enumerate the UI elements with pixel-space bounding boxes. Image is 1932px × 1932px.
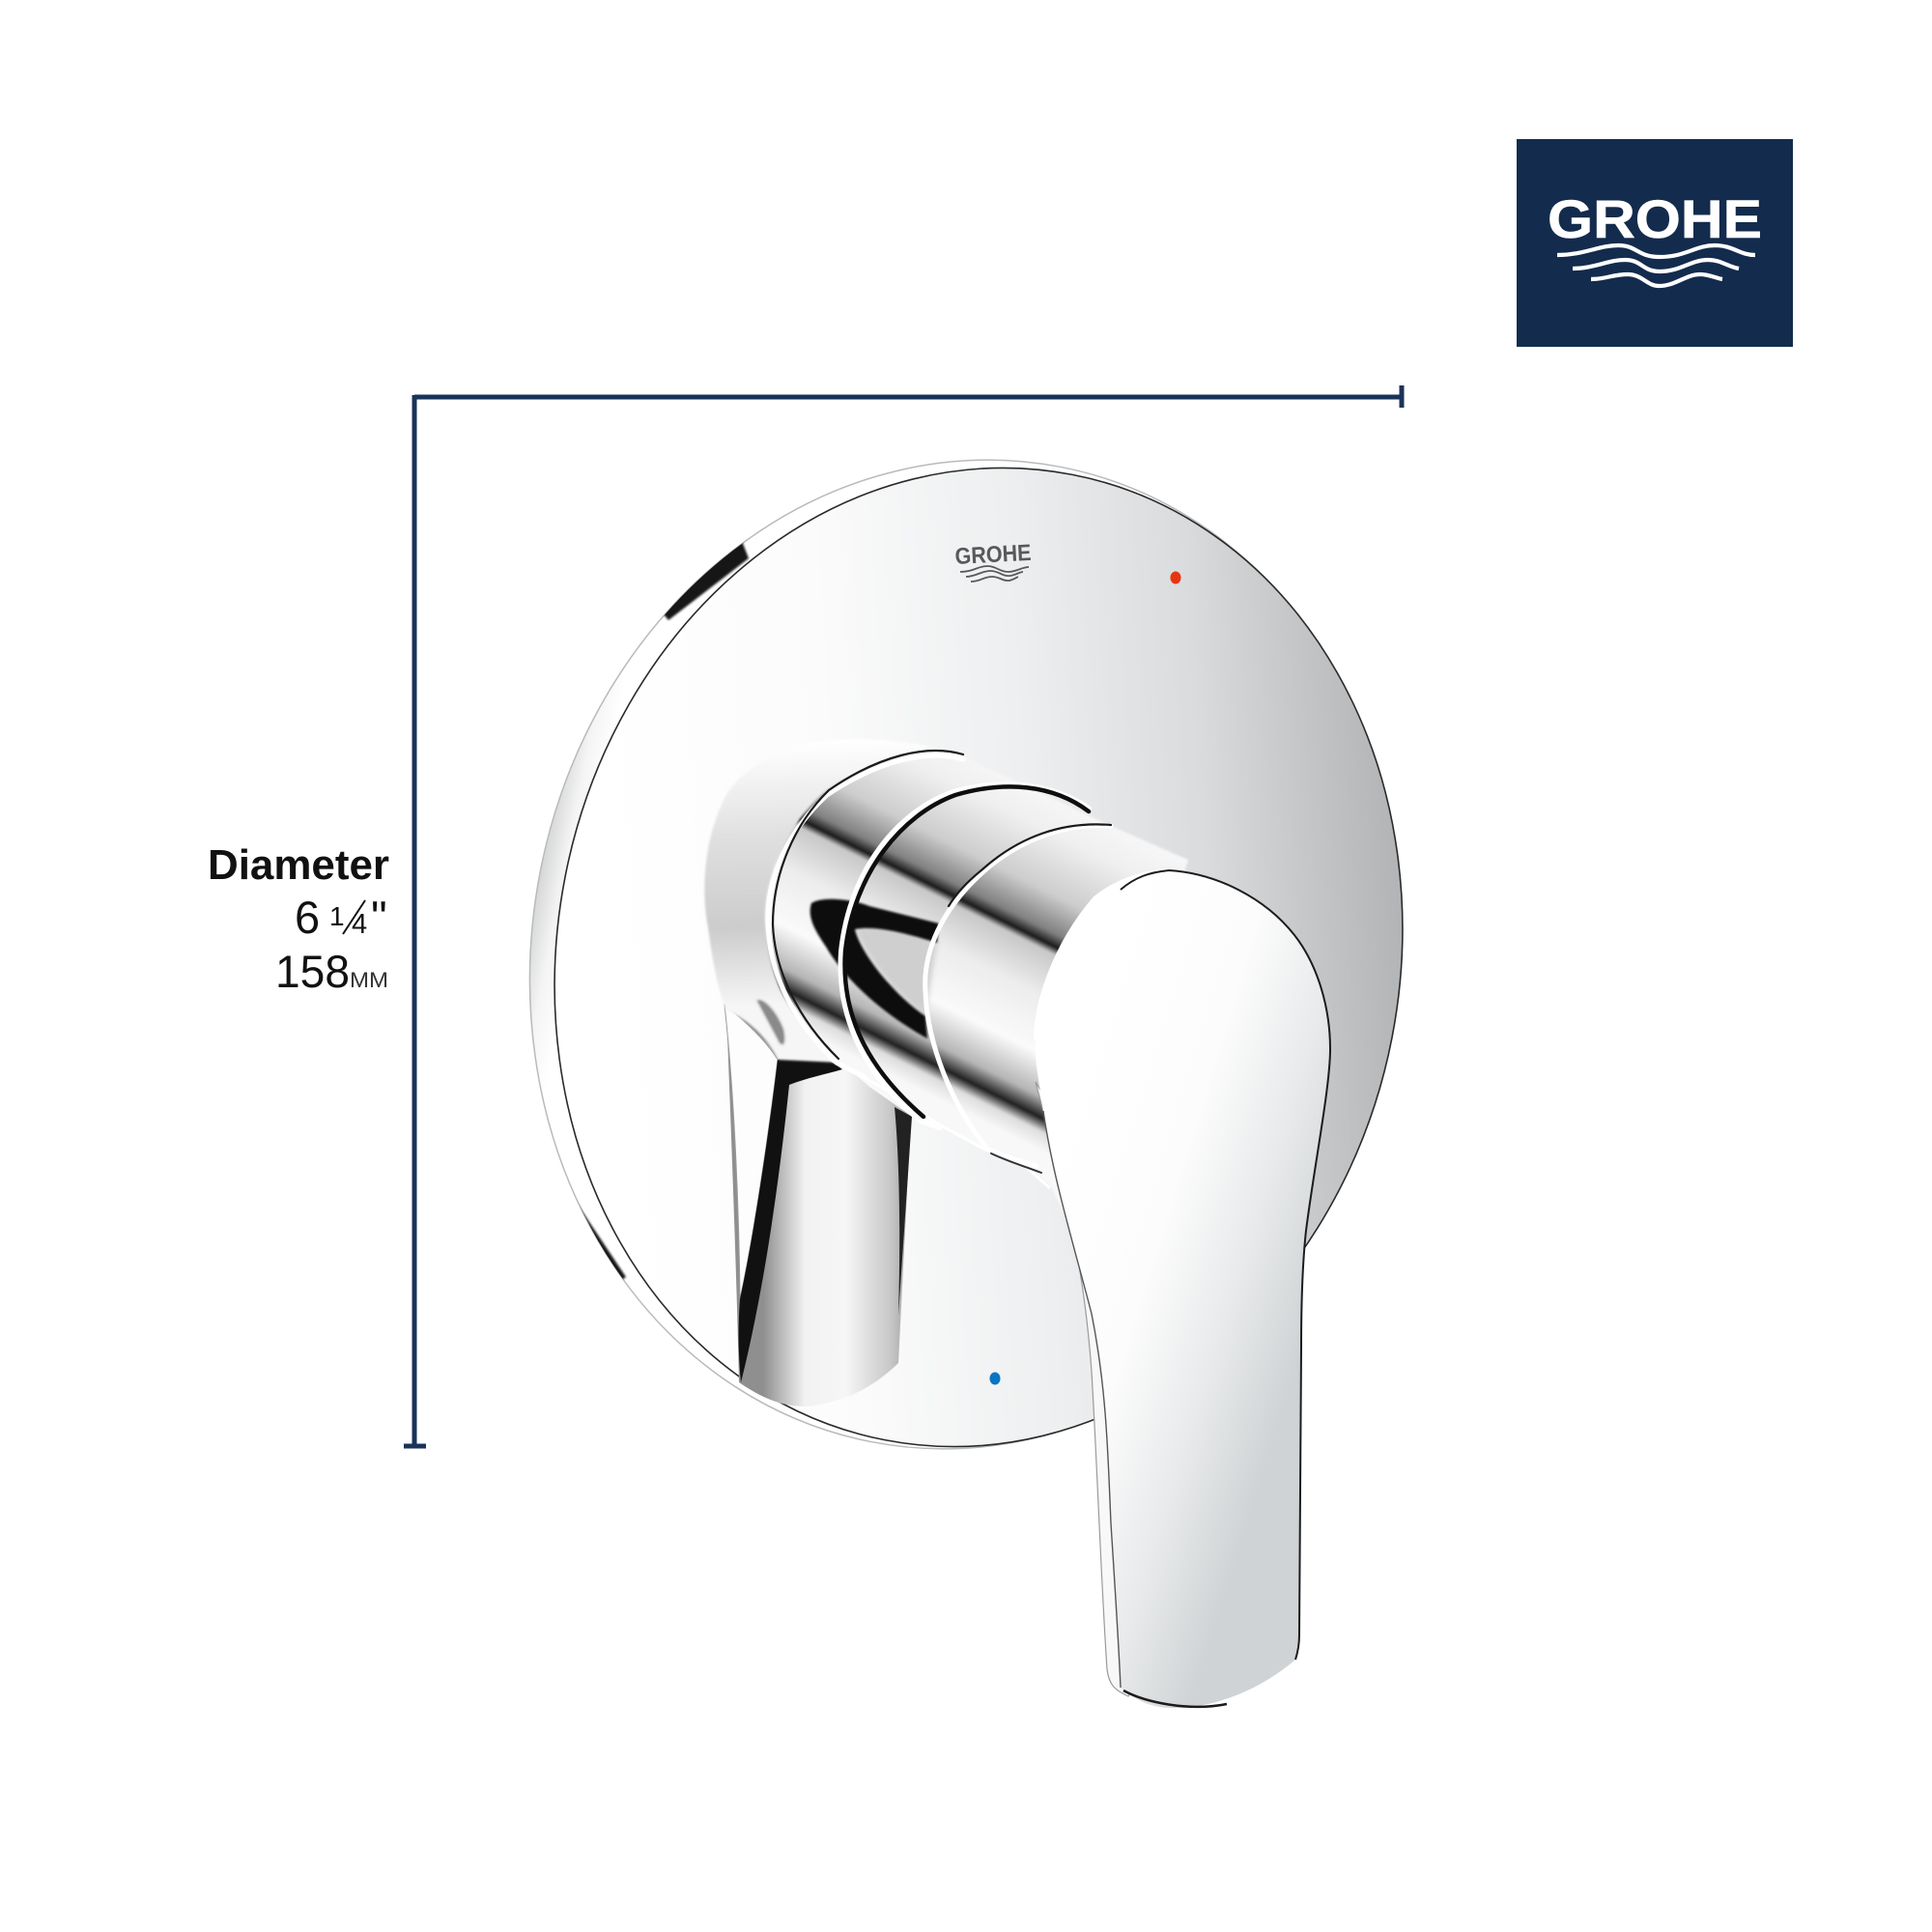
cylinder dark reflection wedge bbox=[810, 899, 939, 1038]
groove 2 bbox=[841, 784, 1089, 1127]
lever chamfer bbox=[1036, 1082, 1159, 1696]
hot indicator dot bbox=[1171, 572, 1180, 583]
text: diameter dimension: 4 bbox=[352, 909, 367, 940]
cylinder inner highlight bbox=[855, 926, 937, 1014]
dimension bracket: diameter bbox=[404, 385, 1402, 1446]
lever face bbox=[1035, 870, 1330, 1708]
arm right dark sliver bbox=[895, 1107, 912, 1316]
arm dark wedge bbox=[739, 1053, 842, 1382]
cold indicator dot bbox=[989, 1372, 1001, 1385]
text: diameter dimension bbox=[208, 841, 389, 997]
text: diameter dimension: 1 bbox=[329, 901, 345, 931]
lever outline bbox=[1036, 870, 1330, 1707]
text: diameter dimension: MM bbox=[350, 968, 388, 992]
lower arm bbox=[724, 1005, 912, 1406]
back plate rim bbox=[529, 459, 1279, 1450]
rear collar bbox=[704, 739, 963, 1063]
plate engraved logo: GROHE bbox=[954, 540, 1032, 570]
plate engraved logo bbox=[954, 540, 1032, 582]
ring grooves bbox=[768, 751, 1111, 1173]
logo wordmark: GROHE bbox=[1548, 188, 1762, 249]
cylinder body bbox=[765, 753, 1188, 1246]
cylinder lower edge highlight bbox=[836, 1063, 1050, 1188]
arm left highlight bbox=[724, 1005, 778, 1299]
screw detail bbox=[755, 999, 785, 1045]
logo: GROHE navy badge bbox=[1517, 139, 1793, 347]
plate front face bbox=[471, 394, 1486, 1520]
text: diameter dimension: Diameter bbox=[208, 841, 389, 889]
logo waves bbox=[1557, 245, 1755, 286]
groove 3 bbox=[925, 824, 1111, 1173]
product: valve trim bbox=[529, 459, 1404, 1708]
text: diameter dimension: 158 bbox=[275, 946, 350, 997]
text: diameter dimension: 6 bbox=[295, 892, 320, 943]
text: diameter dimension: " bbox=[371, 892, 387, 943]
groove 1 bbox=[768, 751, 963, 1077]
